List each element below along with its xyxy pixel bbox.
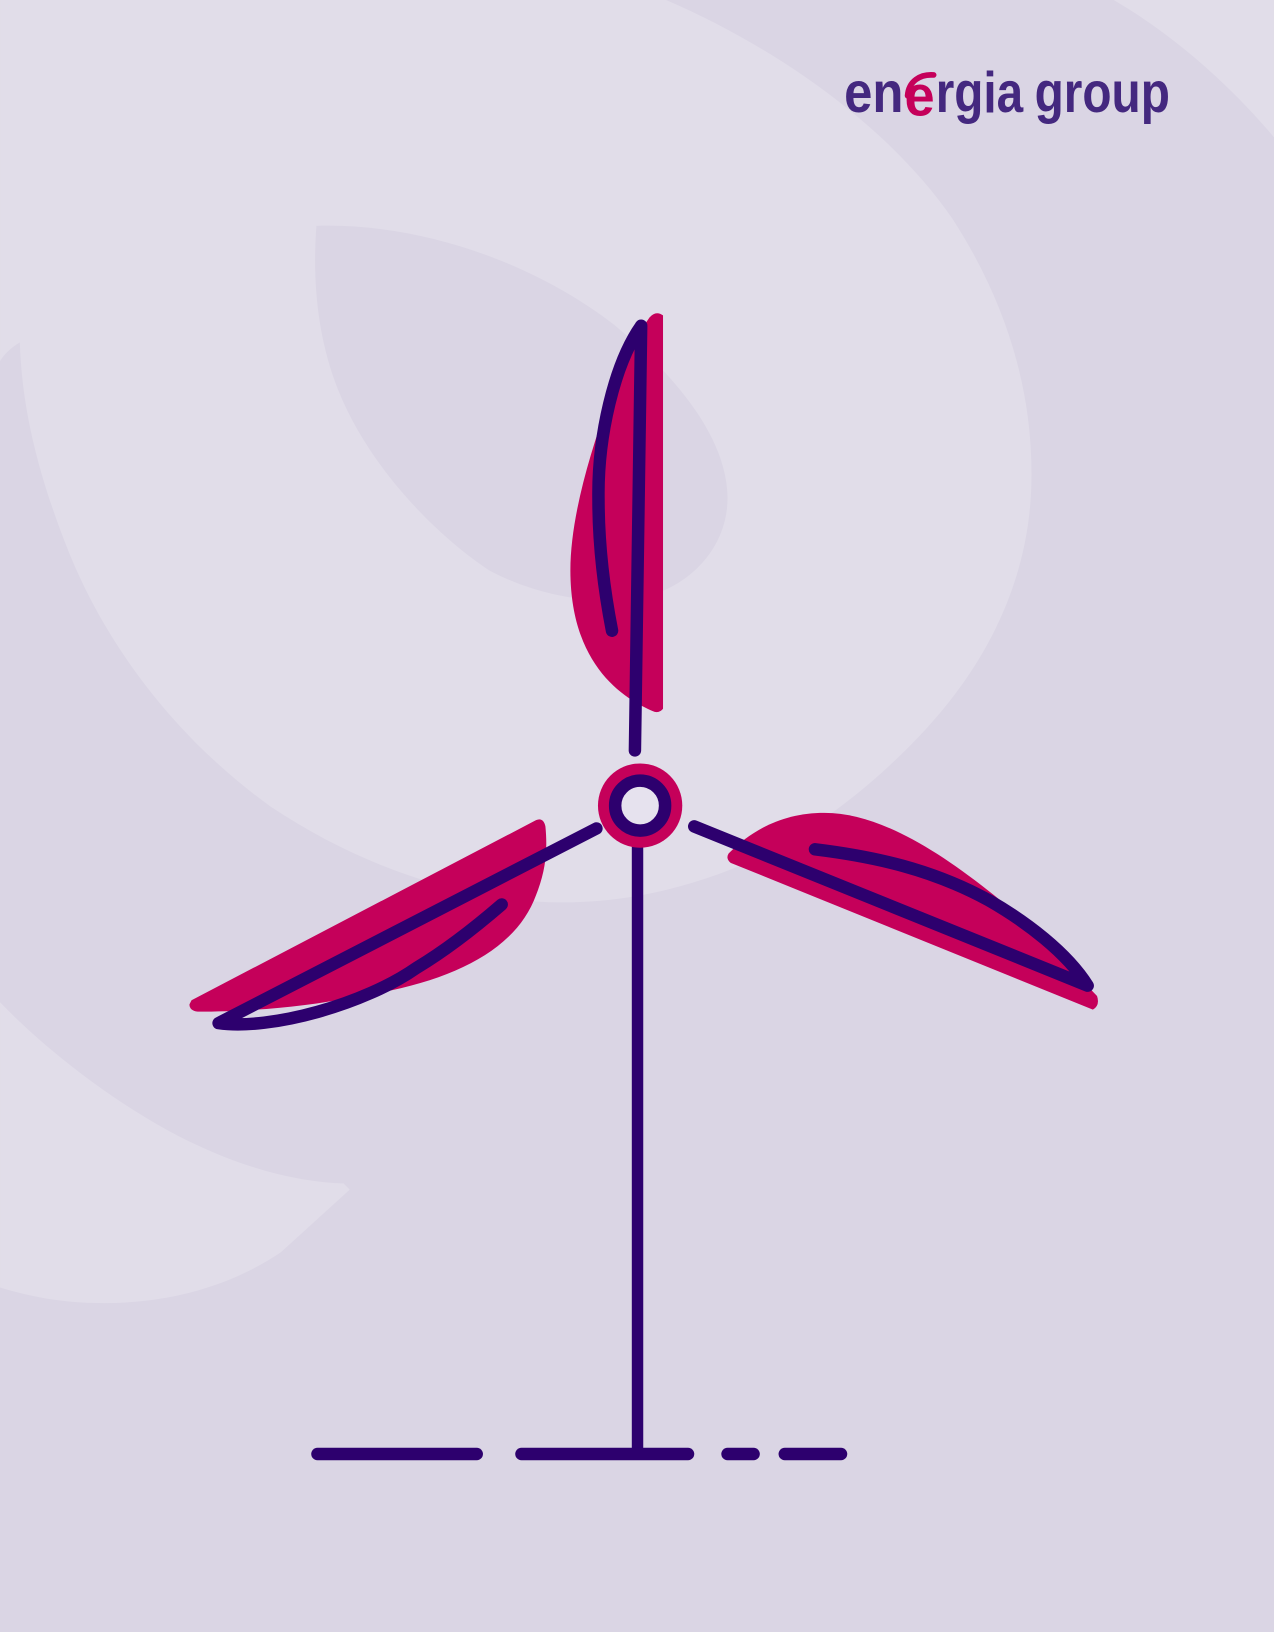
hub [598, 763, 682, 848]
ground dashes [317, 1448, 841, 1460]
top blade fill [570, 313, 663, 712]
logo word: en: en [844, 61, 903, 125]
left blade fill [189, 819, 546, 1012]
left blade [189, 819, 596, 1024]
background: large light leaf shape [0, 0, 1032, 902]
left blade outline [219, 828, 596, 1024]
top blade outline [598, 326, 641, 750]
right blade outline [694, 826, 1088, 986]
top blade [570, 313, 663, 750]
background: top right light corner [1114, 0, 1274, 137]
logo word: rgia: rgia [936, 61, 1024, 125]
background: bottom left light shape [0, 1002, 350, 1303]
logo letter: swirl e: e [904, 65, 935, 129]
logo word: group: group [1035, 61, 1170, 125]
logo [844, 61, 1170, 129]
tower [632, 843, 643, 1453]
right blade fill [727, 813, 1098, 1010]
wind turbine [189, 313, 1098, 1454]
background: inner dark drop shape [315, 226, 728, 601]
right blade [694, 813, 1098, 1010]
